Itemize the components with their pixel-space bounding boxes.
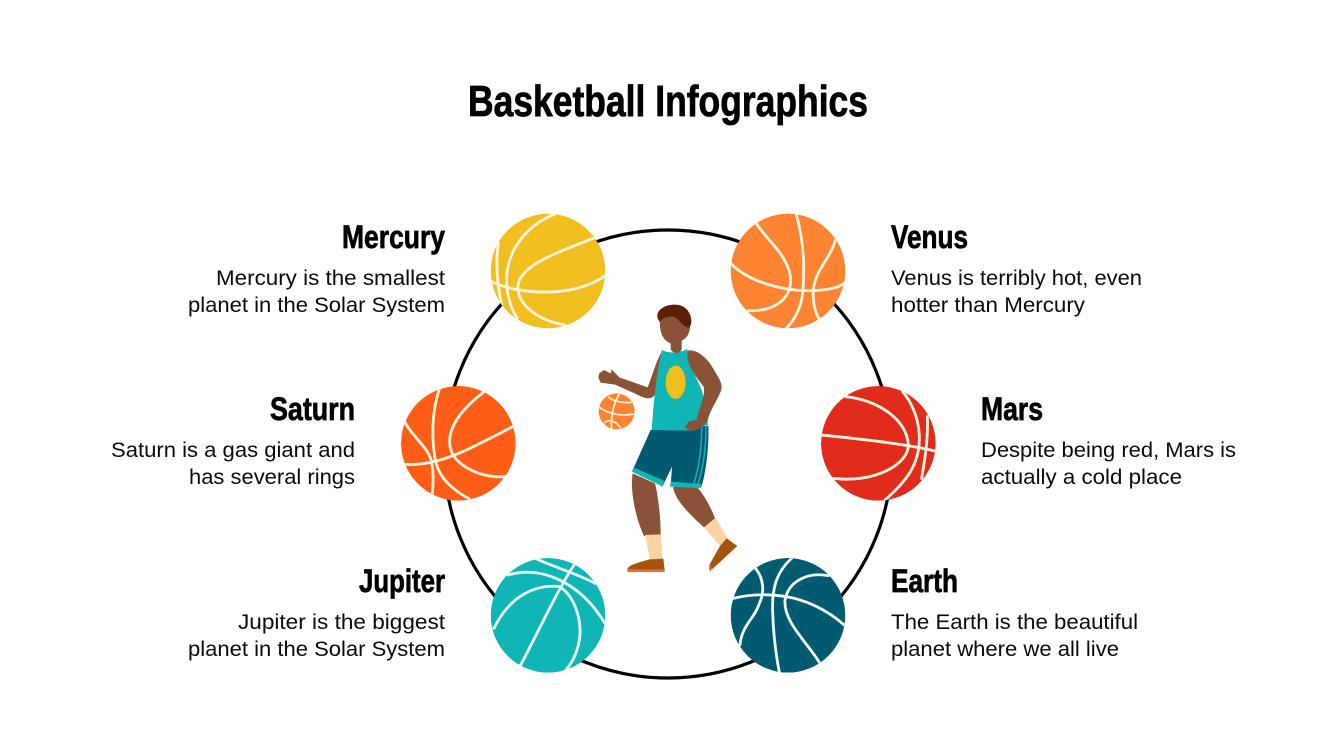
ball: Mars red — [821, 386, 936, 501]
label: Earth: planet where we all live — [891, 637, 1119, 661]
ball: Earth dark teal — [731, 558, 845, 673]
label: Mercury: Mercury is the smallest — [216, 266, 445, 290]
label: Jupiter: planet in the Solar System — [188, 637, 445, 661]
label: Venus: hotter than Mercury — [891, 293, 1085, 317]
ball: Saturn red-orange — [401, 386, 516, 501]
label: Jupiter: Jupiter is the biggest — [238, 610, 445, 634]
player: small orange ball — [599, 393, 635, 429]
label: Jupiter — [188, 563, 445, 661]
player illustration — [598, 305, 737, 572]
player: left arm and hand — [598, 353, 663, 398]
label: Mercury — [188, 219, 445, 317]
ball: Jupiter teal — [491, 558, 605, 673]
title: Basketball Infographics — [468, 77, 868, 126]
label: Earth: Earth — [891, 563, 958, 599]
label: Venus — [891, 219, 1142, 317]
label: Mars: Mars — [981, 391, 1043, 427]
ball: Venus orange — [731, 214, 845, 328]
label: Mars — [981, 391, 1236, 489]
label: Mercury: planet in the Solar System — [188, 293, 445, 317]
label: Venus: Venus is terribly hot, even — [891, 266, 1142, 290]
label: Jupiter: Jupiter — [359, 563, 445, 599]
label: Saturn: has several rings — [189, 465, 355, 489]
label: Venus: Venus — [891, 219, 968, 255]
label: Earth: The Earth is the beautiful — [891, 610, 1138, 634]
player: shoes — [627, 538, 737, 572]
player: head and neck — [660, 313, 690, 353]
label: Mercury: Mercury — [342, 219, 445, 255]
label: Saturn — [111, 391, 355, 489]
player: hair — [657, 305, 691, 327]
player: jersey oval — [666, 366, 686, 399]
player: jersey — [652, 349, 708, 431]
label: Saturn: Saturn — [270, 391, 355, 427]
label: Mars: actually a cold place — [981, 465, 1182, 489]
player: legs and socks — [632, 473, 727, 559]
label: Earth — [891, 563, 1138, 661]
player: shorts — [632, 426, 708, 488]
ball: Mercury yellow — [491, 214, 606, 328]
ring connecting the balls — [444, 230, 892, 678]
player: right arm and hand — [685, 350, 722, 432]
label: Mars: Despite being red, Mars is — [981, 438, 1236, 462]
label: Saturn: Saturn is a gas giant and — [111, 438, 355, 462]
